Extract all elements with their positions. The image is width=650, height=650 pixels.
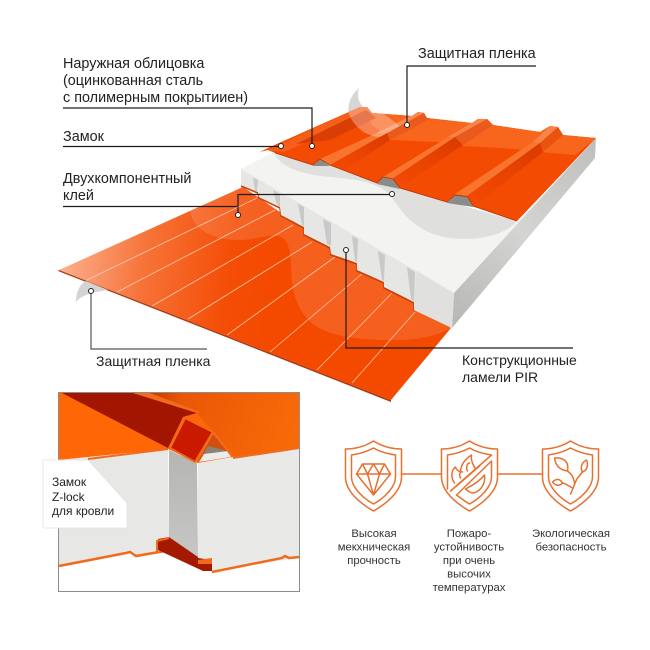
text: ecological safety: Экологическая	[532, 528, 610, 540]
label: outer facing	[63, 56, 314, 148]
text: ecological safety: безопасность	[536, 542, 607, 554]
glue film	[275, 155, 517, 239]
text: mechanical strength: Высокая	[351, 528, 397, 540]
inset: Z-lock detail	[43, 392, 300, 592]
icon: shield with diamond	[346, 441, 402, 511]
rib 3	[383, 137, 455, 179]
text: fire resistance: высочих	[447, 568, 491, 580]
rib 2	[320, 133, 387, 165]
label: adhesive: Двухкомпонентный	[63, 171, 191, 187]
label: PIR lamellas	[344, 248, 577, 385]
text: fire resistance: температурах	[433, 582, 506, 594]
PIR core panel	[241, 138, 596, 328]
protective film on sheet	[190, 187, 451, 340]
text: fire resistance: Пожаро-	[447, 528, 491, 540]
callout: Z-lock	[43, 460, 127, 528]
connector lines between icons	[402, 473, 542, 475]
rib 1	[268, 107, 372, 152]
text: fire resistance: при очень	[443, 555, 495, 567]
label: outer facing: с полимерным покрытииен)	[63, 90, 248, 106]
back strip lighter	[367, 107, 596, 155]
text: fire resistance: устойнивость	[434, 542, 504, 554]
lamella slits	[253, 178, 415, 301]
label: outer facing: Наружная облицовка	[63, 56, 204, 72]
bottom steel sheet	[58, 187, 451, 402]
callout: Z-lock: Z-lock	[52, 490, 86, 504]
label: PIR lamellas: ламели PIR	[462, 369, 538, 385]
label: lock: Замок	[63, 129, 105, 145]
top film sheen	[348, 107, 400, 137]
label: top protective film	[404, 46, 536, 128]
callout: Z-lock: Замок	[52, 475, 87, 489]
label: PIR lamellas: Конструкционные	[462, 352, 577, 368]
text: ecological safety	[532, 528, 610, 554]
callout: Z-lock: для кровли	[52, 504, 114, 518]
text: mechanical strength	[338, 528, 410, 567]
label: top protective film: Защитная пленка	[418, 46, 536, 62]
label: adhesive: клей	[63, 188, 94, 204]
left white block	[59, 449, 169, 565]
label: bottom protective film: Защитная пленка	[96, 353, 211, 369]
roof facing	[260, 100, 596, 221]
rib 4	[455, 142, 540, 196]
label: bottom protective film	[88, 288, 211, 369]
lock ridge	[170, 418, 213, 462]
top film curl	[348, 88, 380, 137]
label: lock	[63, 129, 284, 148]
icon: shield with leaves	[542, 441, 598, 511]
right white block	[198, 448, 299, 571]
text: mechanical strength: прочность	[347, 555, 401, 567]
label: adhesive	[63, 171, 394, 218]
text: fire resistance	[433, 528, 506, 594]
dark rib	[62, 393, 197, 448]
grey gaps under the ribs	[313, 159, 330, 166]
icon: shield with crossed flame	[442, 441, 498, 511]
protective film curl, lower left	[76, 281, 108, 302]
text: mechanical strength: мекхническая	[338, 542, 410, 554]
label: outer facing: (оцинкованная сталь	[63, 73, 203, 89]
joint	[169, 450, 198, 557]
